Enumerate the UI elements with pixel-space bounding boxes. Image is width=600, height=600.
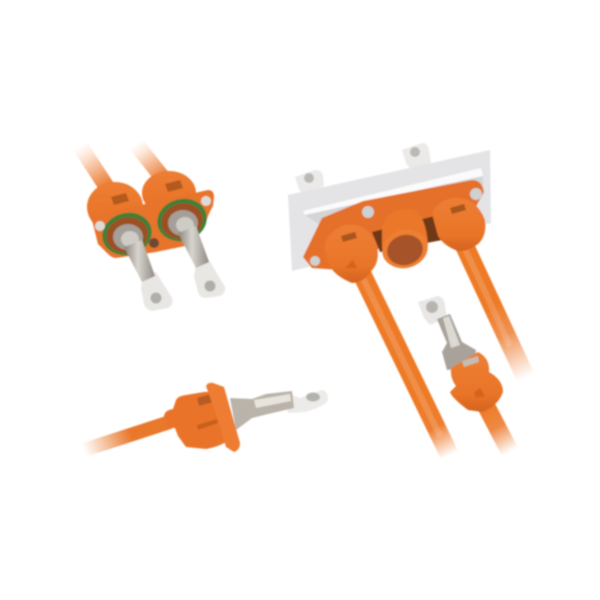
- right cable: [460, 236, 526, 378]
- mounting screws: [95, 196, 211, 248]
- left seal ring: [97, 207, 157, 261]
- right seal ring: [152, 193, 212, 247]
- cable: [482, 398, 510, 452]
- right hood: [432, 198, 485, 251]
- mounting tabs: [295, 143, 431, 196]
- central tube: [378, 209, 432, 273]
- right cable: [136, 144, 166, 182]
- mounting plate connector: top right: [288, 143, 526, 456]
- left hood: [324, 225, 378, 283]
- single connector: bottom right: [418, 296, 510, 452]
- lug: [418, 296, 447, 325]
- left hood: [87, 182, 143, 232]
- metal barrel: [230, 391, 294, 430]
- flange: [206, 383, 240, 452]
- orange flange: [303, 180, 484, 270]
- cable: [84, 422, 170, 450]
- hood: [450, 352, 503, 412]
- metal barrel: [437, 314, 476, 370]
- right hood: [142, 171, 196, 215]
- left cable: [80, 146, 110, 192]
- screws: [310, 188, 482, 266]
- left cable: [356, 262, 450, 456]
- collar and hood: [164, 392, 228, 449]
- lug: [284, 390, 328, 413]
- white plate: [288, 150, 491, 271]
- single connector: bottom left: [84, 383, 328, 452]
- left lug and stem: [124, 240, 172, 311]
- flange: [92, 190, 214, 258]
- right lug and stem: [178, 226, 225, 298]
- connector pair: top left: [80, 144, 225, 311]
